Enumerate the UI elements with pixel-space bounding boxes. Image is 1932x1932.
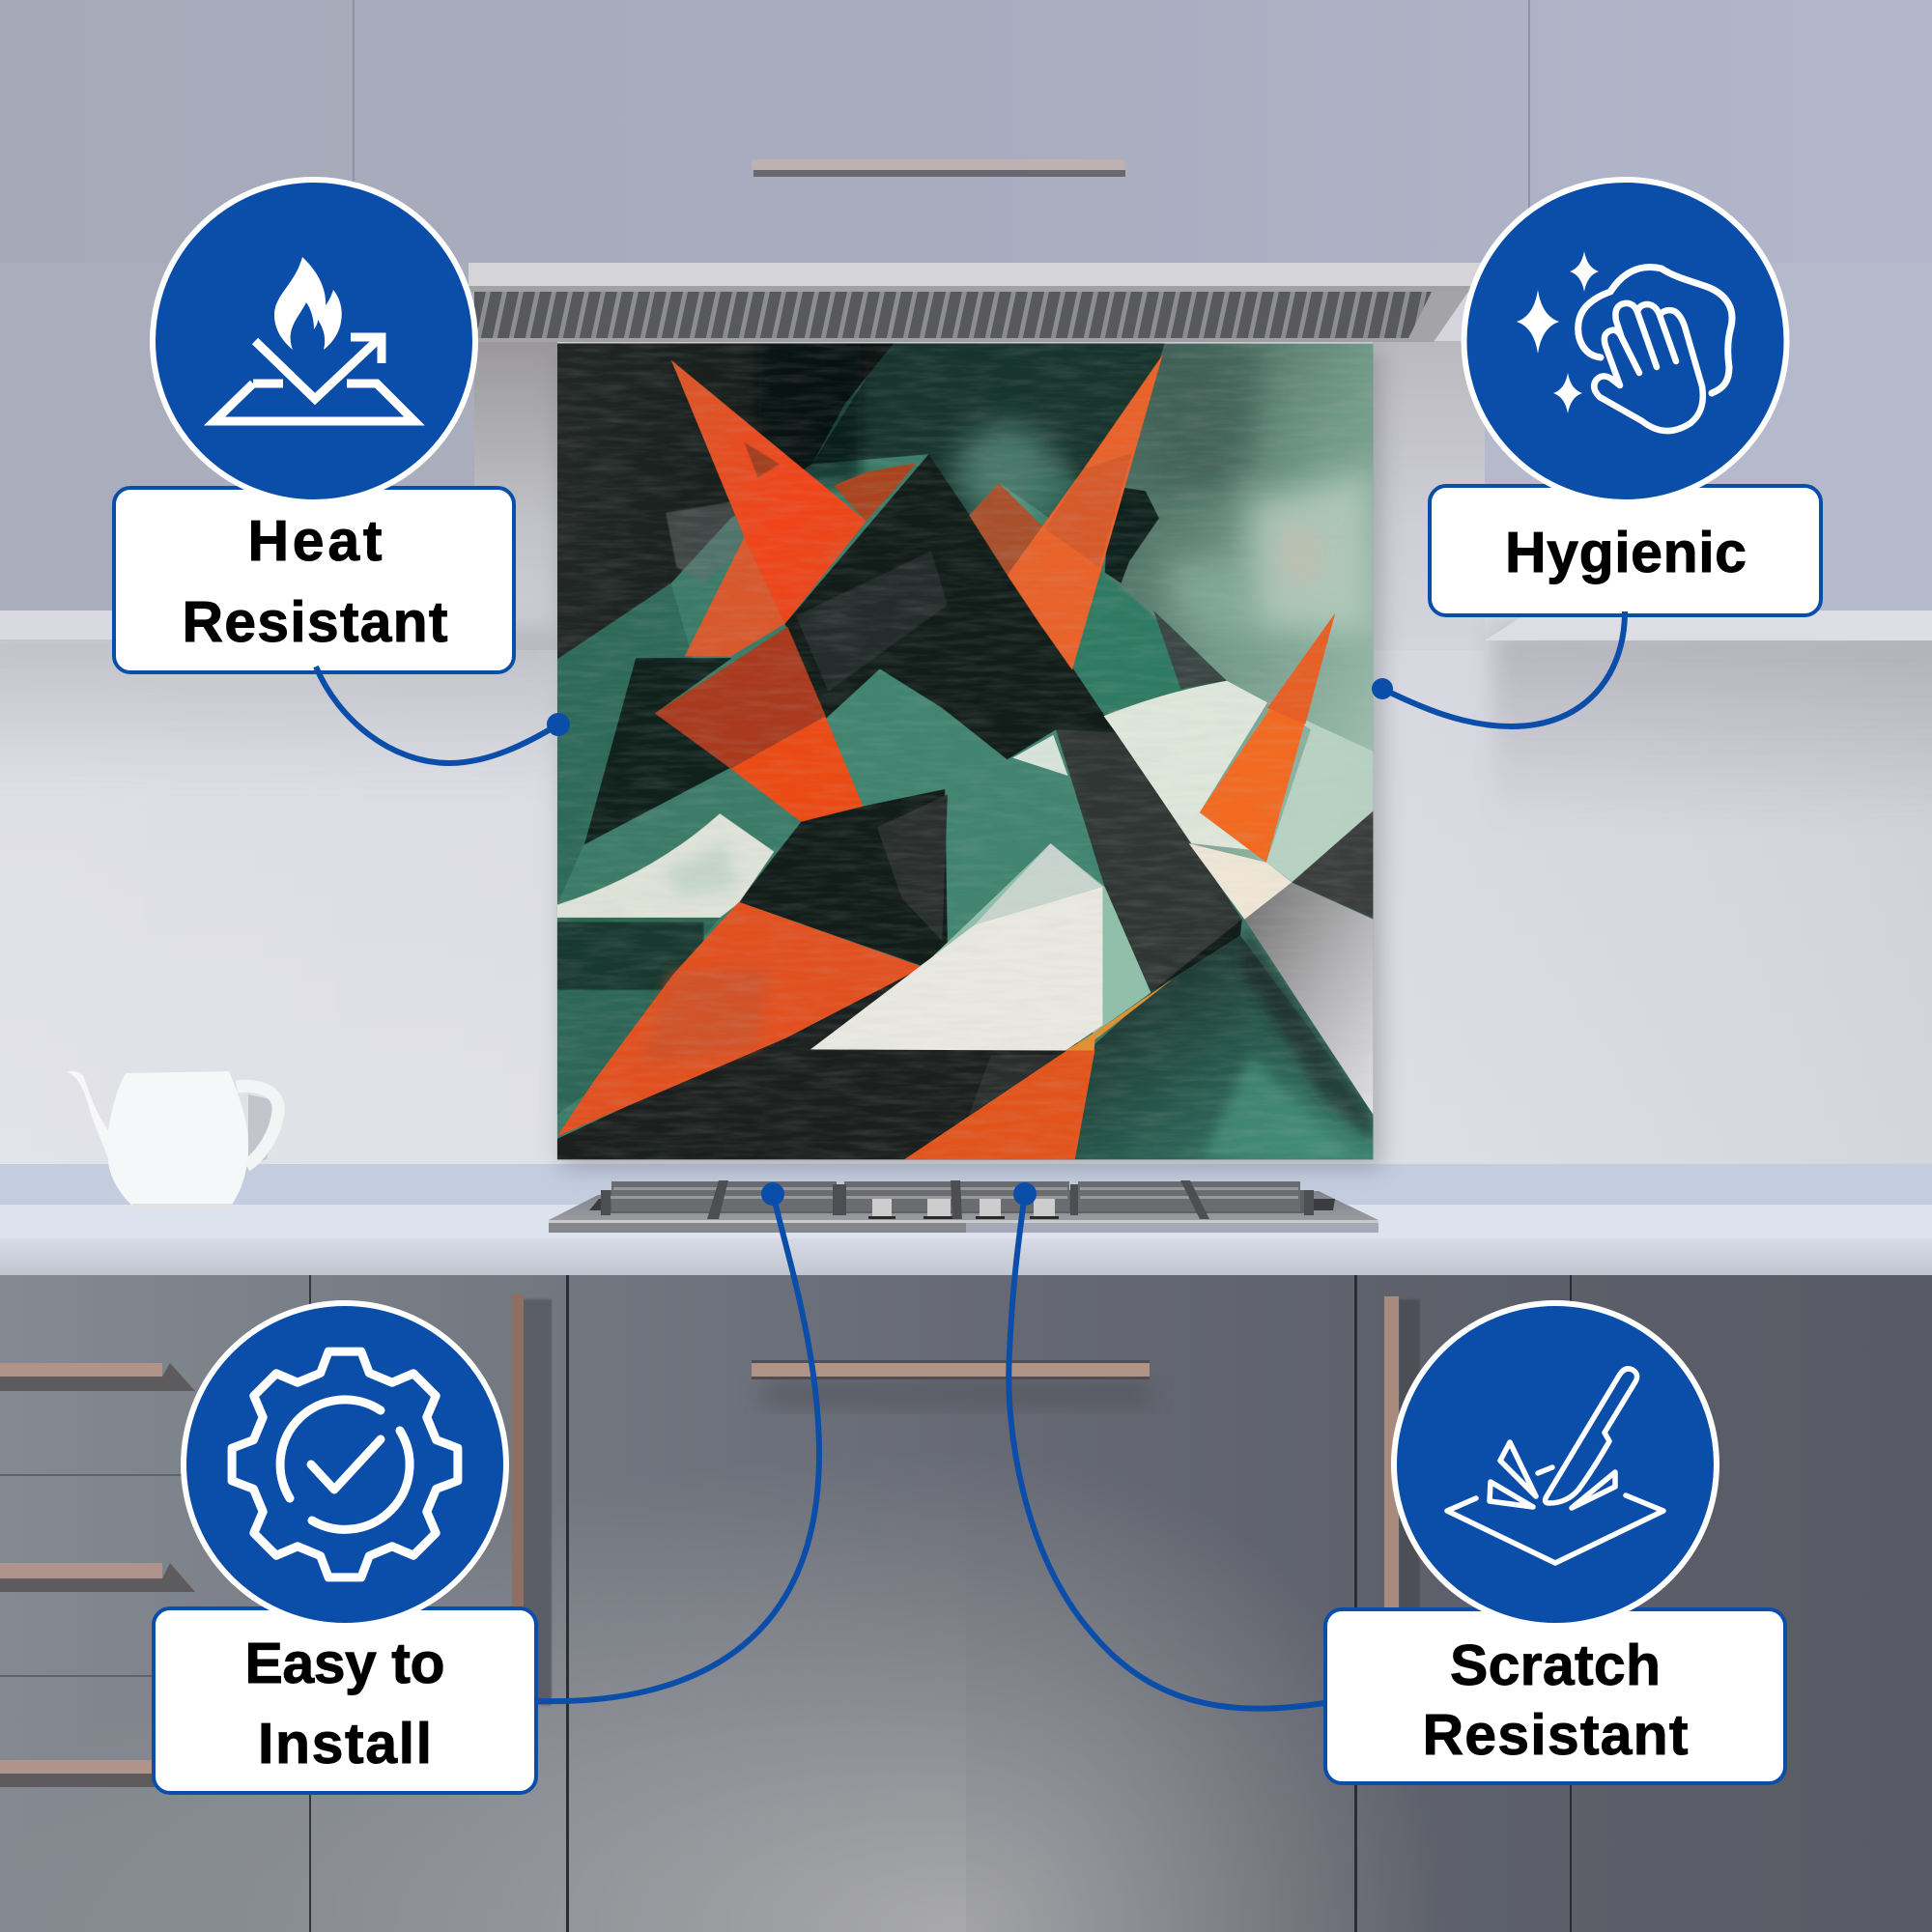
grey wedge — [1244, 883, 1373, 1115]
green under spike — [1072, 573, 1227, 713]
small orange mid triangle — [969, 483, 1042, 575]
splashback panel: abstract geometric artwork — [557, 344, 1373, 1159]
dark right corner — [1292, 810, 1373, 919]
icon badge — [1464, 180, 1787, 502]
label text: Resistant — [1422, 1703, 1689, 1767]
dark central lower block — [739, 789, 948, 965]
light green upper right — [1105, 344, 1373, 884]
callout: Heat Resistant — [114, 180, 570, 763]
far right orange triangle — [1200, 613, 1335, 863]
mid-left green — [557, 583, 693, 905]
orange top-left triangle lower part — [685, 537, 785, 657]
icon badge — [1394, 1303, 1717, 1626]
cooktop — [549, 1180, 1378, 1233]
bottom right field — [1075, 936, 1373, 1159]
label text: Resistant — [182, 590, 448, 654]
large orange lower triangle — [730, 640, 864, 822]
countertop — [0, 1164, 1932, 1275]
connector — [538, 1182, 819, 1701]
label text: Install — [258, 1712, 432, 1776]
label box — [1325, 1609, 1785, 1783]
central dark triangle — [785, 454, 1242, 992]
cabinet handles — [0, 1294, 1420, 1787]
label text: Scratch — [1450, 1634, 1661, 1697]
label box — [114, 488, 514, 672]
label box — [1430, 486, 1821, 615]
connector — [1009, 1182, 1324, 1709]
dark top-left field — [557, 344, 894, 659]
connector — [1372, 611, 1625, 726]
callout: Hygienic — [1372, 180, 1821, 726]
orange sliver — [1065, 979, 1173, 1051]
icon: knife scratching surface — [1447, 1369, 1663, 1563]
orange spike — [1008, 355, 1163, 670]
upper cabinets — [0, 0, 1932, 640]
white jug — [68, 1071, 280, 1209]
painting shadow — [562, 350, 1381, 1169]
icon badge — [184, 1303, 506, 1626]
icon: flame over surface — [214, 257, 414, 421]
orange top-left triangle — [671, 360, 867, 624]
label text: Heat — [247, 509, 383, 573]
connector — [316, 667, 570, 763]
cream lower wedge — [1189, 843, 1292, 920]
bottom orange triangle — [904, 1049, 1095, 1159]
white left hill — [557, 813, 774, 918]
label text: Easy to — [245, 1632, 444, 1695]
label text: Hygienic — [1505, 521, 1747, 584]
label text — [245, 1632, 444, 1776]
lower cabinets — [0, 1275, 1932, 1932]
icon: gear with check — [232, 1351, 458, 1577]
icon: hand wiping with sparkles — [1517, 251, 1732, 431]
central green — [828, 670, 1103, 941]
lower left dark band — [557, 918, 720, 1115]
white main triangle — [810, 887, 1102, 1051]
left dark triangle — [584, 658, 732, 844]
brush texture overlay — [557, 344, 1373, 1159]
pale translucent triangle — [921, 843, 1151, 1034]
callout: Easy to Install — [154, 1182, 819, 1793]
label text — [182, 509, 448, 654]
control knobs — [872, 1199, 1055, 1217]
lower left orange triangle — [557, 902, 923, 1136]
bottom dark field — [557, 968, 1095, 1159]
burner grates — [601, 1180, 1314, 1219]
small orange shard — [834, 463, 916, 521]
label text — [1422, 1634, 1689, 1767]
dark green top arc — [812, 344, 1164, 567]
extractor hood — [469, 263, 1478, 342]
icon badge — [153, 180, 475, 502]
cream right shape — [1104, 681, 1267, 850]
darkened upper orange section — [655, 627, 826, 769]
wall shading under cabinets — [0, 341, 1932, 831]
callout: Scratch Resistant — [1009, 1182, 1785, 1783]
label box — [154, 1608, 536, 1793]
